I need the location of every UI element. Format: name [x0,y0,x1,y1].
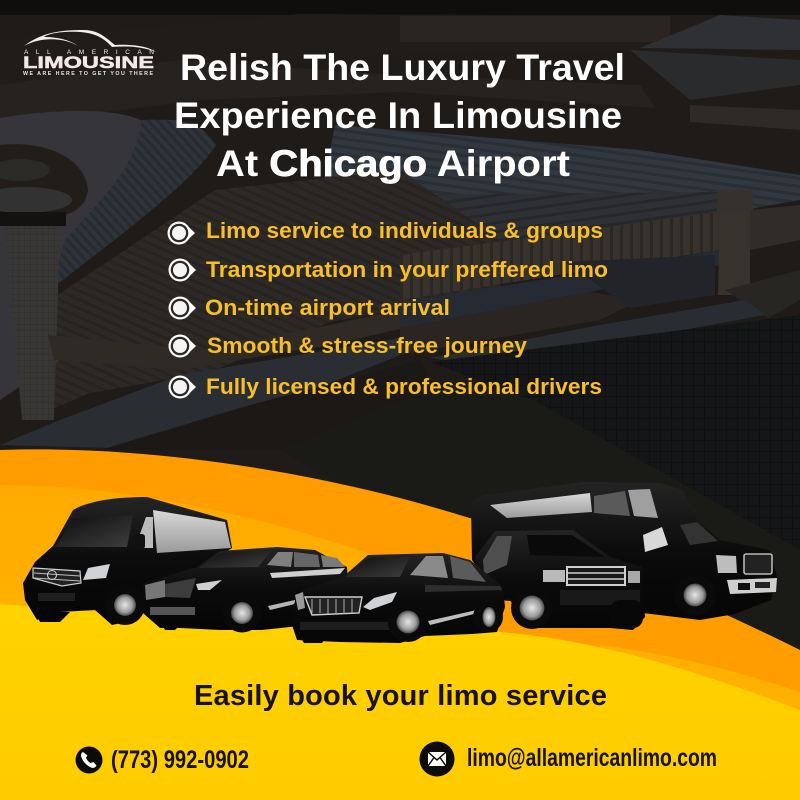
logo car swoosh [24,30,156,52]
list item 1: Limo service to individuals & groups [206,218,603,243]
email address: limo@allamericanlimo.com [467,744,717,772]
list item 5: Fully licensed & professional drivers [206,374,602,399]
feature list [168,218,608,399]
list item 3: On-time airport arrival [205,295,450,320]
logo wordmark: LIMOUSINE [23,53,154,72]
phone number: (773) 992-0902 [111,746,249,774]
lower right dark building [430,315,800,660]
list item 4: Smooth & stress-free journey [207,333,528,358]
left curved roof [0,111,215,400]
list item 2: Transportation in your preffered limo [206,257,608,282]
icon: envelope [420,742,454,776]
phone contact [76,746,249,774]
logo: All American Limousine [23,30,156,77]
vehicle: Mercedes sedan [292,553,505,643]
logo tagline: WE ARE HERE TO GET YOU THERE [23,71,153,77]
title line 2: Experience In Limousine [174,94,622,136]
right ribbed roof [320,125,800,255]
icon: phone [76,746,102,774]
logo top line: ALL AMERICAN [24,49,154,56]
central roof [50,170,500,410]
vehicle: Lincoln sedan [143,547,350,632]
terminal facades [48,288,500,370]
control tower [5,226,60,420]
email contact [420,742,717,776]
vehicle: SUV [475,530,645,630]
yellow and orange curved base [0,449,800,800]
vehicle: party bus [471,482,777,620]
title line 1: Relish The Luxury Travel [180,46,625,88]
vehicle: Sprinter van [23,497,232,625]
title [174,46,625,184]
booking heading: Easily book your limo service [194,680,607,712]
title line 3: At Chicago Airport [216,142,571,184]
vehicle fleet [23,482,777,643]
